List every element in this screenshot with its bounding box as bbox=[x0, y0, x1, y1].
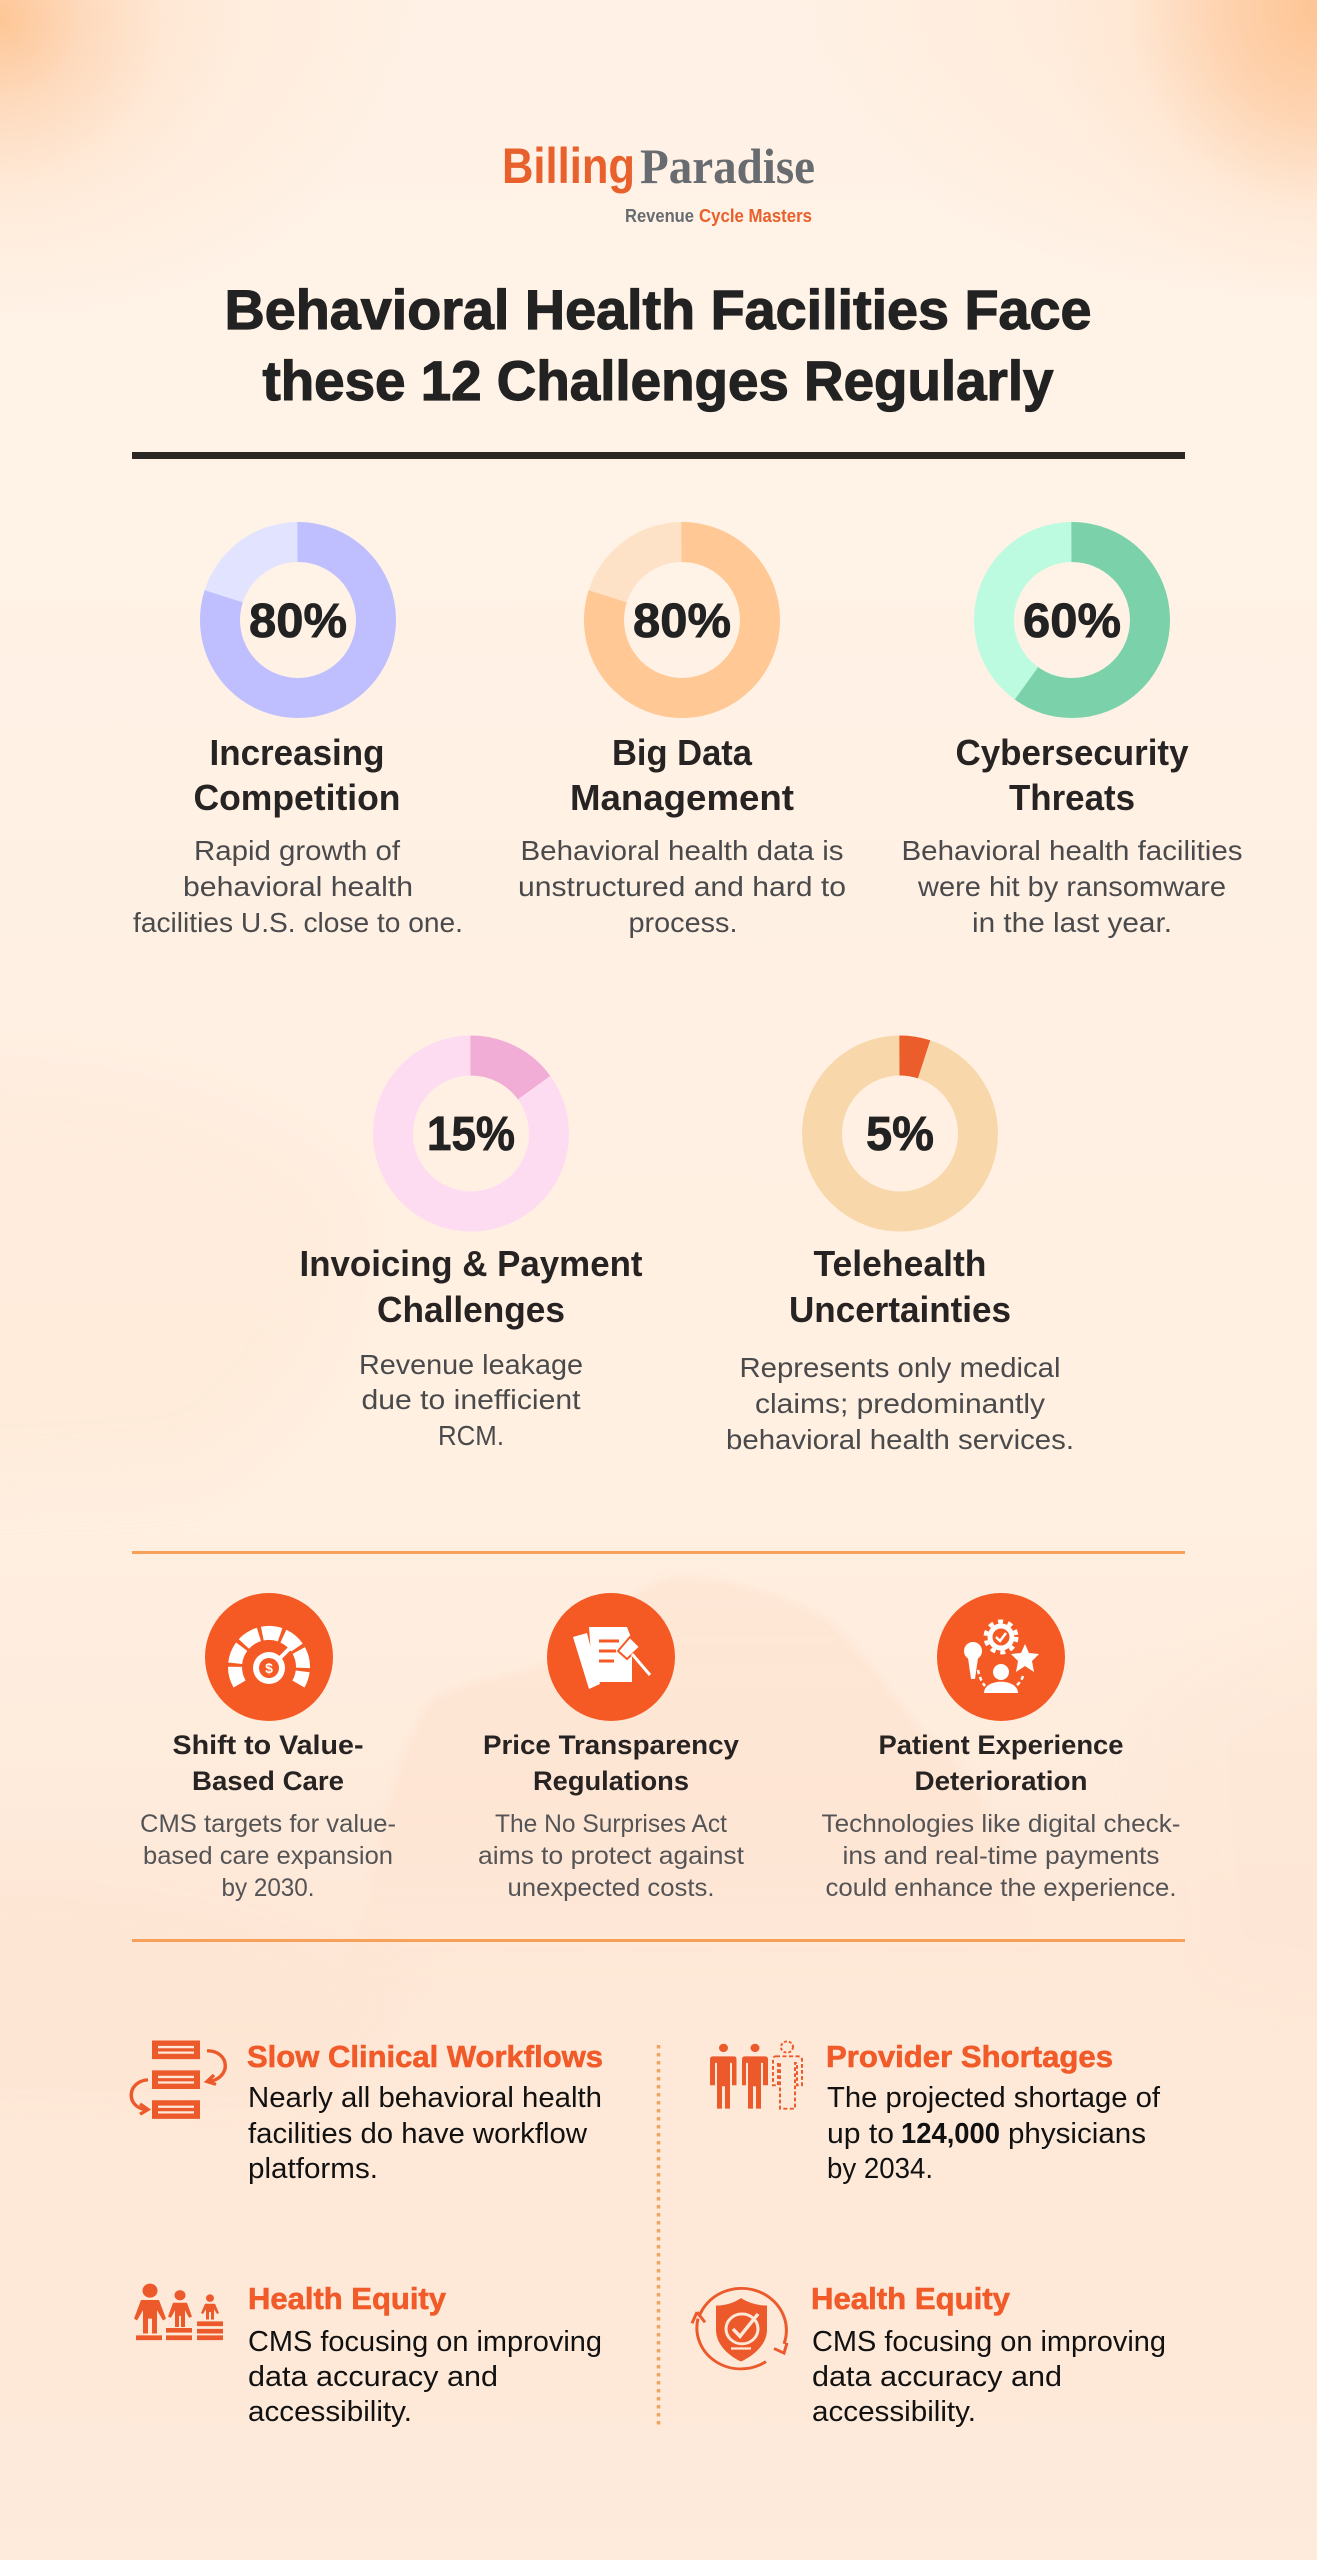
donut chart: 80%: 80% bbox=[633, 595, 731, 648]
text: Telehealth description: behavioral health services. bbox=[726, 1424, 1074, 1455]
donut chart: 80% bbox=[604, 542, 760, 698]
text: Invoicing & Payment description bbox=[359, 1349, 583, 1451]
text: Health Equity description: CMS focusing on improving bbox=[812, 2326, 1166, 2358]
text: Telehealth description bbox=[726, 1352, 1074, 1455]
text: Big Data Management description: Behavioral health data is bbox=[520, 835, 844, 866]
heading: Shift to Value-Based Care: Shift to Value- bbox=[172, 1730, 364, 1760]
heading: Cybersecurity Threats bbox=[956, 732, 1188, 818]
text: Big Data Management description: unstructured and hard to bbox=[518, 871, 846, 902]
heading: Health Equity: Health Equity bbox=[811, 2281, 1011, 2316]
icon: patient with gear, bulb, star bbox=[937, 1593, 1065, 1721]
heading: Invoicing & Payment Challenges: Challenges bbox=[377, 1289, 565, 1330]
logo: Paradise bbox=[640, 138, 815, 194]
panel: Big Data Management bbox=[518, 542, 846, 938]
heading: Patient Experience Deterioration: Patient Experience bbox=[878, 1730, 1124, 1760]
panel: Patient Experience Deterioration bbox=[822, 1593, 1180, 1902]
heading: Increasing Competition: Competition bbox=[194, 777, 400, 818]
logo: Cycle Masters bbox=[699, 206, 812, 226]
title bbox=[224, 278, 1092, 412]
panel: Telehealth Uncertainties bbox=[726, 1056, 1074, 1455]
logo: Billing bbox=[502, 138, 635, 194]
text: Big Data Management description: process. bbox=[628, 907, 738, 938]
heading: Shift to Value-Based Care: Based Care bbox=[192, 1766, 344, 1796]
text: Value-Based Care description: based care expansion bbox=[143, 1842, 393, 1870]
text: Invoicing & Payment description: Revenue leakage bbox=[359, 1349, 583, 1380]
panel: Shift to Value-Based Care bbox=[140, 1593, 396, 1902]
title: these 12 Challenges Regularly bbox=[262, 349, 1054, 412]
heading: Telehealth Uncertainties: Telehealth bbox=[814, 1243, 986, 1284]
icon: shield with check bbox=[692, 2288, 787, 2369]
text: Provider Shortages description: physicians bbox=[1008, 2118, 1146, 2150]
text: Increasing Competition description bbox=[133, 835, 463, 938]
text: Telehealth description: claims; predominantly bbox=[755, 1388, 1045, 1419]
text: Slow Clinical Workflows description: Nearly all behavioral health bbox=[248, 2082, 602, 2114]
heading: Patient Experience Deterioration bbox=[878, 1730, 1124, 1796]
icon: gauge: $ bbox=[265, 1660, 273, 1676]
text: Value-Based Care description bbox=[140, 1810, 396, 1902]
panel: Cybersecurity Threats bbox=[902, 542, 1242, 938]
panel: Invoicing & Payment Challenges bbox=[300, 1056, 643, 1451]
donut chart: 15% bbox=[393, 1056, 549, 1212]
icon: document and gavel bbox=[547, 1593, 675, 1721]
heading: Invoicing & Payment Challenges: Invoicing & Payment bbox=[300, 1243, 643, 1284]
text: Cybersecurity Threats description bbox=[902, 835, 1242, 938]
donut chart: 80% bbox=[220, 542, 376, 698]
text: Price Transparency description: unexpected costs. bbox=[508, 1874, 714, 1902]
heading: Telehealth Uncertainties bbox=[789, 1243, 1011, 1330]
icon: three people, one dashed bbox=[710, 2041, 802, 2109]
heading: Patient Experience Deterioration: Deterioration bbox=[914, 1766, 1088, 1796]
text: Invoicing & Payment description: due to inefficient bbox=[362, 1384, 581, 1415]
heading: Shift to Value-Based Care bbox=[172, 1730, 364, 1796]
text: Price Transparency description: The No Surprises Act bbox=[495, 1810, 727, 1838]
panel: Price Transparency Regulations bbox=[478, 1593, 744, 1902]
text: Health Equity description: data accuracy and bbox=[812, 2361, 1062, 2393]
text: Cybersecurity Threats description: were hit by ransomware bbox=[917, 871, 1226, 902]
panel: Health Equity (second) bbox=[692, 2281, 1166, 2428]
heading: Increasing Competition bbox=[194, 732, 400, 818]
text: Big Data Management description bbox=[518, 835, 846, 938]
logo: Revenue bbox=[625, 206, 694, 226]
heading: Big Data Management: Big Data bbox=[612, 732, 753, 773]
text: Health Equity description: CMS focusing on improving bbox=[248, 2326, 602, 2358]
heading: Provider Shortages: Provider Shortages bbox=[826, 2039, 1113, 2074]
donut chart: 15%: 15% bbox=[427, 1108, 515, 1161]
heading: Telehealth Uncertainties: Uncertainties bbox=[789, 1289, 1011, 1330]
heading: Increasing Competition: Increasing bbox=[210, 732, 384, 773]
heading: Price Transparency Regulations bbox=[483, 1730, 739, 1796]
heading: Cybersecurity Threats: Cybersecurity bbox=[956, 732, 1188, 773]
panel: Provider Shortages bbox=[710, 2039, 1161, 2185]
heading: Slow Clinical Workflows: Slow Clinical Workflows bbox=[247, 2039, 603, 2074]
heading: Big Data Management bbox=[570, 732, 794, 818]
donut chart: 5%: 5% bbox=[866, 1108, 934, 1161]
text: Health Equity description: data accuracy and bbox=[248, 2361, 498, 2393]
text: Increasing Competition description: Rapid growth of bbox=[194, 835, 400, 866]
text: Patient Experience description: Technologies like digital check- bbox=[822, 1810, 1180, 1838]
text: Value-Based Care description: CMS targets for value- bbox=[140, 1810, 396, 1838]
text: Cybersecurity Threats description: Behavioral health facilities bbox=[902, 835, 1242, 866]
heading: Big Data Management: Management bbox=[570, 777, 794, 818]
text: Price Transparency description: aims to protect against bbox=[478, 1842, 744, 1870]
panel: Health Equity bbox=[134, 2281, 602, 2428]
text: Increasing Competition description: behavioral health bbox=[183, 871, 413, 902]
donut chart: 5% bbox=[822, 1056, 978, 1212]
title: Behavioral Health Facilities Face bbox=[224, 278, 1092, 341]
icon: people on steps bbox=[134, 2284, 223, 2340]
icon: workflow bbox=[131, 2040, 225, 2119]
text: Value-Based Care description: by 2030. bbox=[222, 1874, 314, 1902]
text: Health Equity description bbox=[248, 2326, 602, 2428]
text: Telehealth description: Represents only medical bbox=[740, 1352, 1060, 1383]
text: Health Equity description: accessibility. bbox=[248, 2396, 412, 2428]
icon: gauge bbox=[205, 1593, 333, 1721]
text: Increasing Competition description: facilities U.S. close to one. bbox=[133, 907, 463, 938]
text: Slow Clinical Workflows description: facilities do have workflow bbox=[248, 2118, 588, 2150]
logo bbox=[502, 138, 815, 226]
text: Provider Shortages description: 124,000 bbox=[901, 2118, 1000, 2150]
text: Provider Shortages description: up to bbox=[827, 2118, 894, 2150]
heading: Price Transparency Regulations: Regulations bbox=[533, 1766, 689, 1796]
panel: Increasing Competition bbox=[133, 542, 463, 938]
text: Cybersecurity Threats description: in the last year. bbox=[972, 907, 1172, 938]
text: Invoicing & Payment description: RCM. bbox=[438, 1420, 504, 1451]
text: Provider Shortages description bbox=[827, 2082, 1161, 2185]
text: Price Transparency description bbox=[478, 1810, 744, 1902]
heading: Cybersecurity Threats: Threats bbox=[1009, 777, 1135, 818]
donut chart: 80%: 80% bbox=[249, 595, 347, 648]
text: Patient Experience description: ins and real-time payments bbox=[842, 1842, 1160, 1870]
text: Patient Experience description bbox=[822, 1810, 1180, 1902]
text: Provider Shortages description: The projected shortage of bbox=[827, 2082, 1161, 2114]
heading: Health Equity: Health Equity bbox=[248, 2281, 447, 2316]
text: Health Equity description: accessibility. bbox=[812, 2396, 976, 2428]
text: Patient Experience description: could enhance the experience. bbox=[826, 1874, 1176, 1902]
heading: Invoicing & Payment Challenges bbox=[300, 1243, 643, 1330]
donut chart: 60%: 60% bbox=[1023, 595, 1121, 648]
text: Slow Clinical Workflows description: platforms. bbox=[248, 2153, 378, 2185]
donut chart: 60% bbox=[994, 542, 1150, 698]
text: Slow Clinical Workflows description bbox=[248, 2082, 602, 2185]
text: Health Equity description bbox=[812, 2326, 1166, 2428]
text: Provider Shortages description: by 2034. bbox=[827, 2153, 933, 2185]
panel: Slow Clinical Workflows bbox=[131, 2039, 603, 2185]
heading: Price Transparency Regulations: Price Transparency bbox=[483, 1730, 739, 1760]
